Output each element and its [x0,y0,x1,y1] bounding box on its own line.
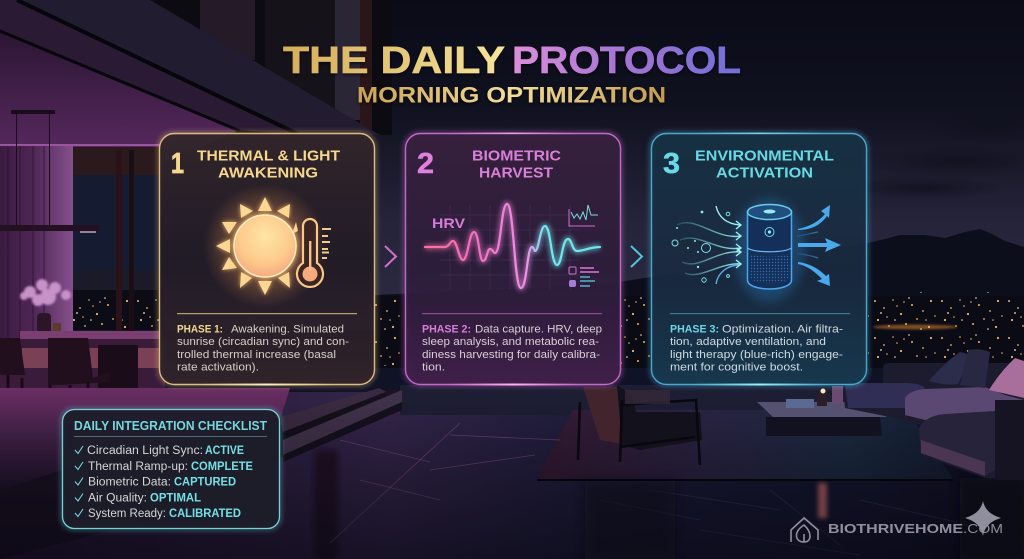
icon: sparkle [965,501,1001,536]
dining table and chairs [20,331,160,339]
body text: diness harvesting for daily calibra- [422,349,600,361]
body text: tion. [422,362,445,374]
title [283,40,741,108]
body text: ment for cognitive boost. [670,362,803,374]
heading [695,148,834,182]
checklist heading: DAILY INTEGRATION CHECKLIST [74,418,267,433]
panel: phase 2 biometric harvest [405,132,621,386]
armchair [583,387,628,445]
body text [670,324,843,374]
checklist rows: Thermal Ramp-up: [88,461,188,473]
heading [472,148,561,182]
icon: sun with thermometer [203,184,331,308]
body text: Data capture. HRV, deep [475,324,602,336]
phase number 1: 1 [171,148,184,180]
arrow: phase 2 to phase 3 [631,246,642,267]
panel: daily integration checklist [62,409,280,529]
heading [197,148,340,182]
icon: data rows [569,267,599,287]
divider [177,313,357,314]
icon: air purifier with airflow [672,198,841,302]
flowers [20,279,71,306]
watermark: BioThriveHome logo [791,501,1003,542]
body text: Optimization. Air filtra- [722,324,843,336]
marble veins [330,423,560,543]
subtitle: Morning Optimization: MORNING OPTIMIZATION [357,82,666,108]
floor [0,392,1024,559]
mountain [375,229,1024,330]
fascia band [17,0,380,135]
body text: sleep analysis, and metabolic rea- [422,336,599,348]
body text: Awakening. Simulated [231,324,344,336]
checklist rows: Air Quality: [88,492,147,504]
pink floor reflection [0,388,290,490]
checklist rows: Circadian Light Sync: [87,445,203,457]
body text: rate activation). [177,362,259,374]
outgoing air arrows [798,205,841,286]
divider [670,313,850,314]
body text: PHASE 2: [422,324,471,336]
sky [0,0,1024,330]
pendant lamp [11,110,55,114]
left building upper floors [0,0,392,135]
phase number 3: 3 [663,148,680,180]
steps [0,390,402,559]
panel: phase 3 environmental activation [651,132,867,386]
body text: light therapy (blue-rich) engage- [670,349,843,361]
purifier body [748,212,792,289]
heading: THERMAL & LIGHT [197,148,340,164]
sofa [843,363,1024,480]
watermark text [828,521,1003,536]
watermark text: BIOTHRIVEHOME [828,521,963,536]
heading: BIOMETRIC [472,148,561,164]
icon: house with leaf [791,518,818,542]
watermark text: .COM [963,521,1003,536]
title line: The Daily Protocol: THE DAILY [283,40,505,82]
coffee table with books and candle [757,402,887,417]
checklist rows: System Ready: [88,508,166,520]
clouds [845,105,1024,200]
incoming air [677,223,741,275]
heading: HARVEST [479,164,553,182]
title line: The Daily Protocol [283,40,741,82]
body text: PHASE 1: [177,324,223,336]
body text: sunrise (circadian sync) and con- [177,336,349,348]
body text: trolled thermal increase (basal [177,349,336,361]
ceiling [0,30,240,160]
panel: phase 1 thermal and light awakening [159,133,375,386]
title line: The Daily Protocol: PROTOCOL [512,40,741,82]
body text: PHASE 3: [670,324,719,336]
cushions [929,352,970,385]
heading: AWAKENING [218,164,318,182]
arrow: phase 1 to phase 2 [385,246,396,267]
body text [422,324,602,374]
phase number 2: 2 [417,148,434,180]
curtains and wall [0,145,73,395]
checklist rows: CALIBRATED [169,508,241,520]
rug [537,410,953,479]
body text [177,324,349,374]
chart: HRV waveform: HRV [432,215,466,231]
body text: tion, adaptive ventilation, and [670,336,826,348]
divider [422,313,602,314]
city lights [375,296,1024,368]
checklist rows: OPTIMAL [150,492,201,504]
chart: HRV waveform [425,204,600,290]
checklist rows: COMPLETE [191,461,253,473]
checklist rows [75,445,253,520]
checklist rows: ACTIVE [205,445,244,457]
icon: mini chart [569,205,598,226]
heading: ACTIVATION [716,164,813,182]
checklist rows: CAPTURED [174,476,236,488]
dark pillar reflection [314,450,338,559]
window [73,147,163,337]
heading: ENVIRONMENTAL [695,148,834,164]
checklist rows: Biometric Data: [88,476,171,488]
